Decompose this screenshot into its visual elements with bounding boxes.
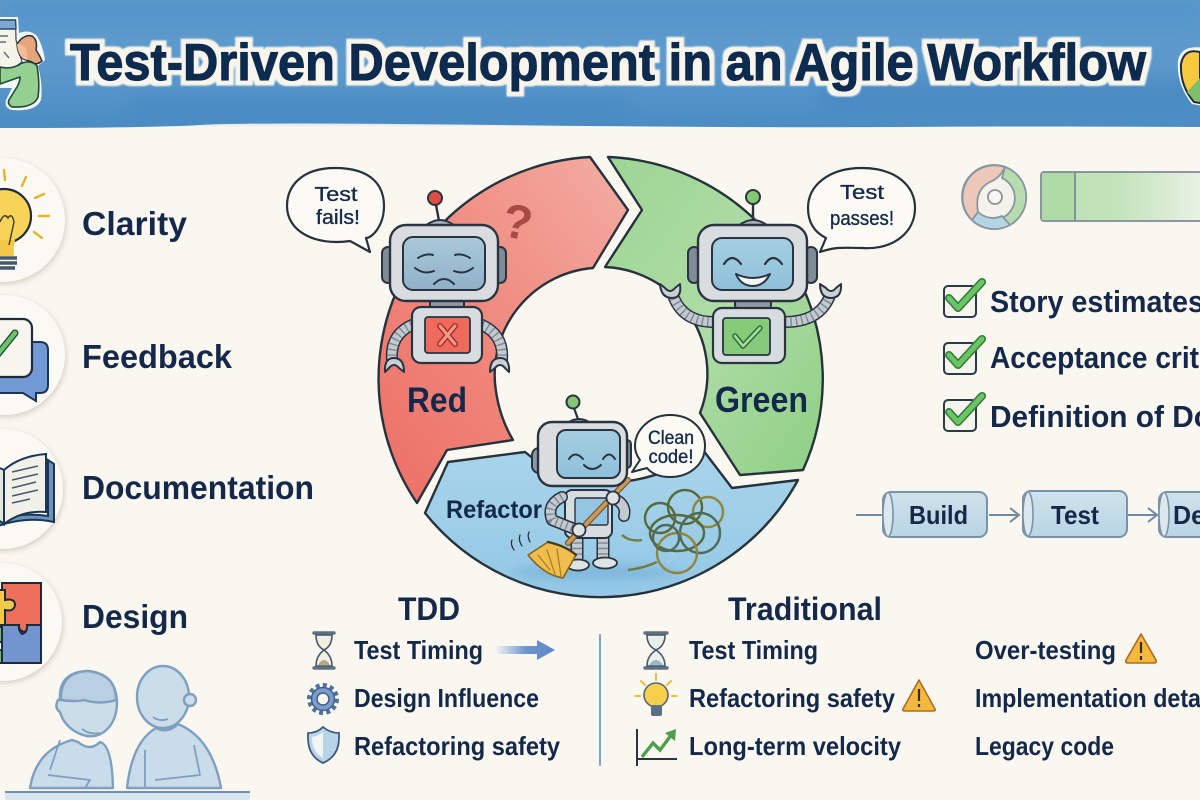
item: documentation: Documentation — [82, 469, 314, 506]
progress bar — [1041, 172, 1200, 221]
row: refactoring safety — [635, 674, 935, 716]
speech bubble: clean code: Clean — [648, 428, 694, 449]
row: design influence: Design Influence — [354, 683, 539, 713]
row: test timing — [645, 633, 818, 668]
divider — [599, 634, 601, 766]
row: over-testing: Over-testing — [975, 635, 1116, 665]
row: legacy code: Legacy code — [975, 731, 1114, 761]
arrow — [495, 640, 555, 660]
speech bubble: test passes: Test — [840, 182, 885, 204]
row: refactoring safety — [308, 727, 560, 763]
row: long-term velocity: Long-term velocity — [689, 731, 901, 761]
row: long-term velocity — [637, 729, 901, 766]
arrow — [989, 508, 1019, 522]
speech bubble: test fails: fails! — [316, 207, 360, 229]
item: clarity: Clarity — [82, 205, 188, 242]
question mark: ? — [498, 194, 537, 252]
comparison: TDD column — [308, 591, 560, 763]
item: feedback — [0, 295, 233, 415]
stage: deploy — [1159, 492, 1200, 537]
arrow — [1128, 508, 1157, 522]
stage: test: Test — [1051, 500, 1099, 530]
segment: green — [605, 157, 823, 475]
segment: blue — [425, 450, 798, 597]
icon: developer reading a document — [0, 17, 45, 110]
speech bubble: test fails: Test — [314, 184, 358, 206]
speech bubble: clean code — [632, 415, 705, 477]
item: clarity — [0, 158, 188, 282]
speech bubble: test passes: passes! — [830, 208, 894, 230]
checklist — [944, 282, 1200, 434]
warning — [1126, 634, 1156, 663]
row: refactoring safety: Refactoring safety — [689, 683, 895, 713]
stage: build: Build — [909, 500, 968, 530]
header banner — [0, 0, 1200, 128]
stage: build — [883, 492, 987, 537]
icon: mini cycle ring — [962, 165, 1026, 229]
heading: TDD: TDD — [398, 591, 460, 627]
diagram: TDD cycle ring — [379, 157, 823, 597]
title: Test-Driven Development in an Agile Workflow — [70, 34, 1147, 92]
panel: benefits list — [0, 158, 314, 681]
speech bubble: test fails — [287, 168, 384, 252]
stage: test — [1023, 491, 1127, 537]
pipeline flow — [856, 491, 1200, 537]
row: refactoring safety: Refactoring safety — [354, 731, 560, 761]
item: feedback: Feedback — [82, 338, 233, 375]
speech bubble: clean code: code! — [648, 447, 694, 468]
item: design — [0, 563, 188, 681]
label: refactor: Refactor — [446, 496, 542, 524]
warning — [903, 680, 935, 711]
robot: red failing — [382, 191, 509, 372]
comparison: traditional column — [635, 591, 935, 766]
row: test timing: Test Timing — [354, 635, 483, 665]
item: documentation — [0, 429, 314, 549]
icon: idea leaf — [1178, 47, 1200, 106]
heading: traditional: Traditional — [728, 591, 882, 627]
robot: refactor sweeping — [511, 396, 631, 578]
speech bubble: test passes — [808, 168, 915, 252]
comparison: pitfalls column — [975, 634, 1200, 761]
robot: green passing — [660, 190, 841, 363]
floor shadow under refactor robot — [510, 564, 680, 580]
label: green: Green — [715, 379, 808, 420]
progress widget — [962, 165, 1200, 229]
label: red: Red — [407, 381, 467, 420]
row: test timing — [314, 633, 483, 668]
row: test timing: Test Timing — [689, 635, 818, 665]
segment: red — [379, 157, 628, 503]
illustration: pair of developers — [5, 666, 250, 800]
item: design: Design — [82, 598, 188, 635]
icon: tangled code — [622, 490, 723, 573]
